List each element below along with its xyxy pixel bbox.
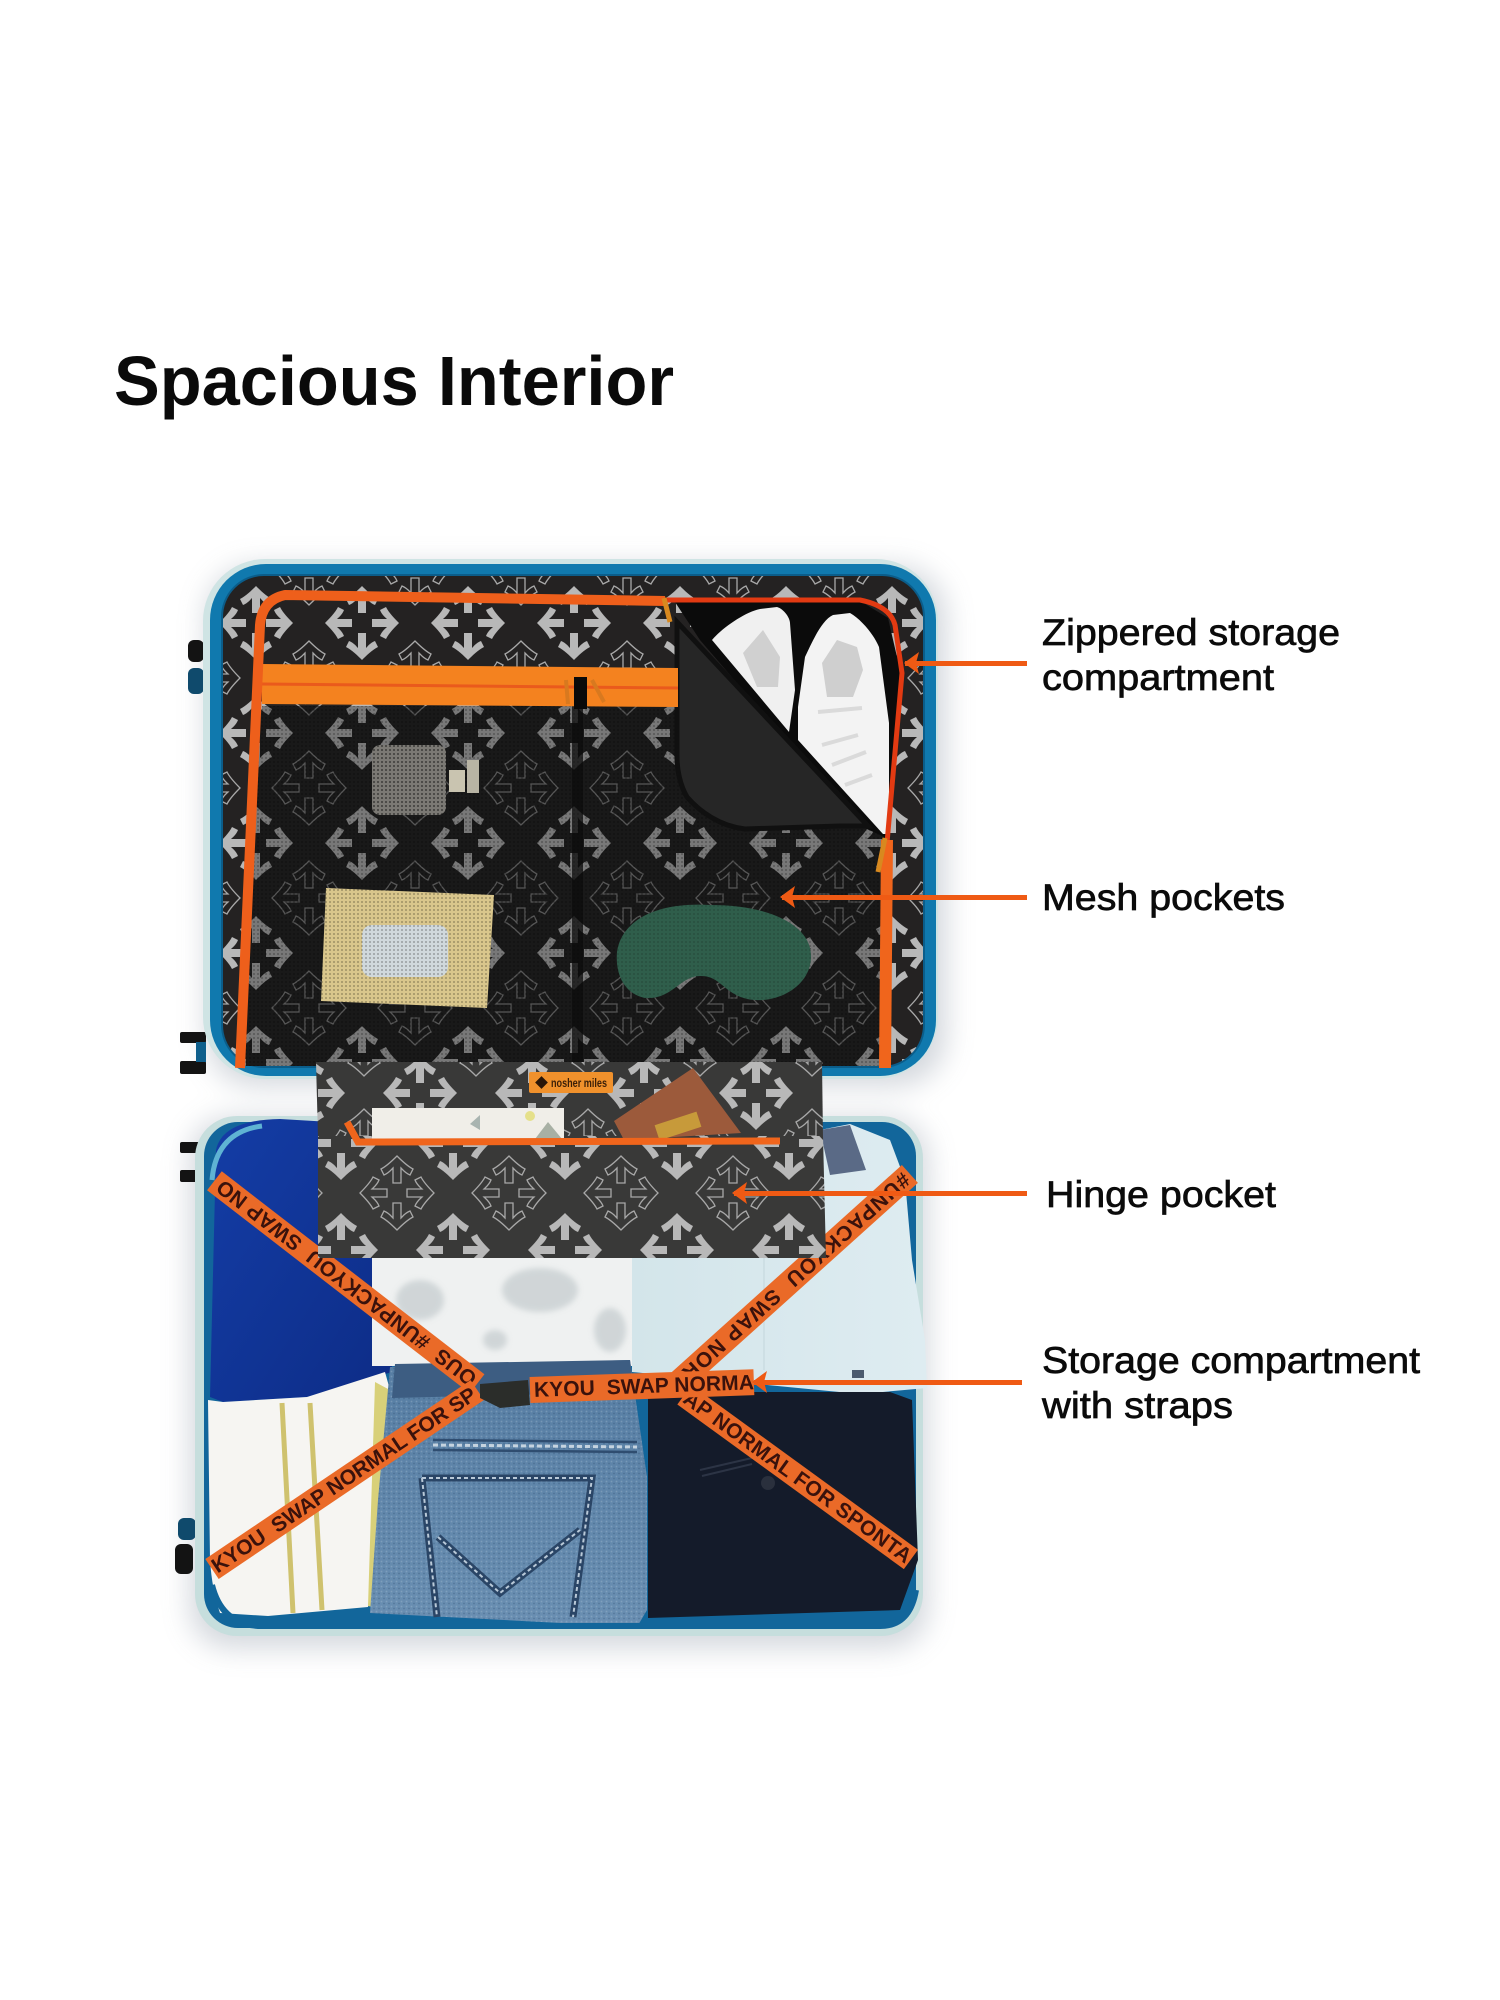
arrow: mesh pockets (780, 886, 1027, 908)
strap: top-right: #UNPACKYOU SWAP NOR (677, 1168, 914, 1384)
callout arrows (732, 652, 1027, 1393)
passport gold charm (655, 1112, 701, 1140)
item: wipes pack (321, 888, 494, 1008)
strap: bottom-right: AP NORMAL FOR SPONTA (679, 1387, 916, 1568)
clothes: white towel (208, 1372, 390, 1616)
arrow: zippered storage compartment (904, 652, 1027, 674)
strap: bottom-left: KYOU SWAP NORMAL FOR SP (208, 1383, 481, 1578)
folded-back lining flap (677, 622, 868, 829)
upper pattern panel (262, 600, 675, 664)
compression straps (205, 1165, 918, 1579)
pocket zipper (347, 1122, 780, 1142)
white card (372, 1108, 564, 1140)
strap: top-left: OUS #UNPACKYOU SWAP NO (212, 1175, 481, 1390)
label: mesh pockets: Mesh pockets (1042, 877, 1285, 918)
passport (614, 1068, 741, 1140)
wheels (175, 640, 214, 1574)
label: storage compartment with straps: with straps (1041, 1385, 1233, 1426)
shell rim lower edge (212, 1585, 916, 1626)
upper shell (203, 559, 938, 1079)
hinge pocket (316, 1062, 826, 1258)
label: storage compartment with straps: Storage compartment (1042, 1340, 1421, 1381)
arrow: storage compartment with straps (752, 1371, 1022, 1393)
main perimeter zipper (240, 595, 902, 1068)
strap buckle (480, 1380, 530, 1408)
zipped shoe compartment (675, 602, 900, 838)
arrow: hinge pocket (732, 1182, 1027, 1204)
suitcase illustration (175, 559, 1421, 1648)
clothes: light blue shirt (632, 1124, 927, 1394)
soft drop shadow (190, 566, 946, 1648)
clothes: dark trousers (648, 1392, 918, 1618)
callout labels (1041, 612, 1421, 1426)
mesh pocket panel (240, 706, 885, 1066)
item: perfume bottle (372, 745, 479, 815)
wide horizontal zipper (262, 664, 678, 709)
label: zippered storage compartment: compartment (1042, 657, 1275, 698)
item: eye mask (617, 905, 811, 1000)
label: hinge pocket: Hinge pocket (1046, 1174, 1277, 1215)
clothes: blue shirt (210, 1119, 392, 1402)
clothes: patterned white top (372, 1256, 634, 1366)
title: Spacious Interior (114, 342, 674, 420)
shoes (712, 607, 889, 834)
label: zippered storage compartment: Zippered storage (1042, 612, 1340, 653)
brand tag (529, 1072, 613, 1093)
clothes: folded jeans (370, 1360, 647, 1627)
lower shell (195, 1116, 927, 1636)
brand tag: nosher miles (551, 1076, 607, 1090)
strap: horizontal with text: KYOU SWAP NORMA (534, 1371, 754, 1402)
